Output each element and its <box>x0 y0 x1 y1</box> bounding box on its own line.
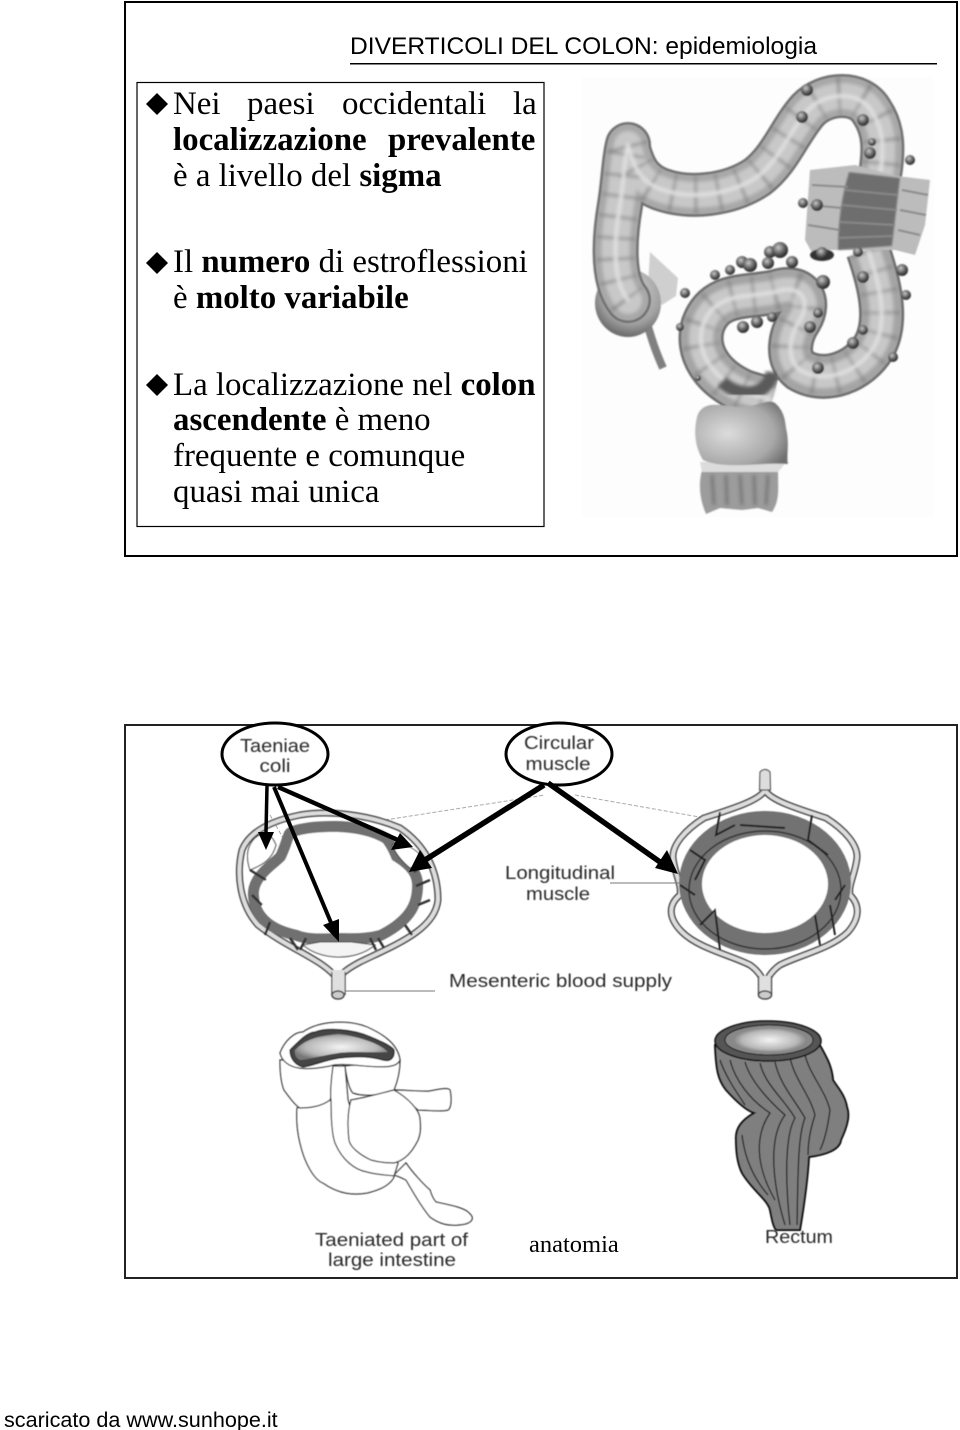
stalk: mesenteric vessel <box>332 970 345 999</box>
bullet text: colon ascendente <box>146 367 536 510</box>
illustration: taeniated part of large intestine <box>280 1022 472 1225</box>
bullet text: numero di estroflessioni: è molto variabile <box>173 280 409 316</box>
bullet text: localizzazione prevalente <box>146 86 537 194</box>
bullet text: colon ascendente: La localizzazione nel colon <box>173 367 536 403</box>
colon: caecum and appendix <box>595 252 678 368</box>
heading: slide title: DIVERTICOLI DEL COLON: epidemiologia <box>350 33 817 60</box>
caption: anatomia: anatomia <box>529 1231 619 1258</box>
bullet text: localizzazione prevalente: localizzazione <box>173 122 367 158</box>
label: Longitudinal muscle: muscle <box>526 884 590 904</box>
arrow: circular muscle to left ring <box>409 785 544 872</box>
illustration: colon with diverticula <box>582 77 934 517</box>
bullet text: localizzazione prevalente: è a livello del sigma <box>173 158 442 194</box>
callout: Taeniae coli: coli <box>260 756 290 776</box>
arrow: taeniae to bottom band <box>274 787 339 942</box>
bullet text: colon ascendente: quasi mai unica <box>173 474 380 510</box>
colon: twist shadow <box>722 372 772 393</box>
bullet text: numero di estroflessioni: Il numero di estroflessioni <box>173 244 528 280</box>
guide lines <box>270 795 705 930</box>
label: Longitudinal muscle: Longitudinal <box>505 863 615 883</box>
arrow: taeniae to right band <box>278 787 413 850</box>
diagram: left ring with taeniae <box>239 813 438 999</box>
bullet text: localizzazione prevalente: Nei <box>173 86 220 122</box>
label: Longitudinal muscle <box>505 863 680 904</box>
colon: descending and sigmoid <box>701 250 882 400</box>
panel: text box <box>137 82 544 526</box>
diagram: right ring <box>671 770 857 999</box>
bullet text: colon ascendente: ascendente è meno <box>173 402 431 438</box>
arrow: taeniae to left band <box>258 786 274 850</box>
colon: ascending and transverse <box>616 96 882 300</box>
illustration: rectum <box>715 1021 848 1230</box>
bullet text: localizzazione prevalente: la <box>513 86 537 122</box>
bullet text: localizzazione prevalente: occidentali <box>342 86 486 122</box>
callout: Circular muscle <box>506 723 612 785</box>
colon: opened mesentery section <box>805 165 930 261</box>
callout: Circular muscle: muscle <box>526 754 590 774</box>
callout: Circular muscle: Circular <box>524 733 594 753</box>
label: Taeniated part of large intestine: large intestine <box>328 1250 456 1270</box>
panel: anatomy slide <box>125 723 957 1278</box>
bullet text: localizzazione prevalente: paesi <box>247 86 315 122</box>
bullet text: localizzazione prevalente: prevalente <box>388 122 535 158</box>
title rule <box>350 63 937 64</box>
colon: diverticula <box>676 84 915 381</box>
stalks: vessel ends <box>758 770 772 999</box>
label: Rectum: Rectum <box>765 1227 833 1247</box>
callout: Taeniae coli: Taeniae <box>240 736 310 756</box>
bullet text: colon ascendente: frequente e comunque <box>173 438 465 474</box>
panel: epidemiology slide <box>125 2 957 556</box>
label: Taeniated part of large intestine <box>315 1230 469 1270</box>
callout: Taeniae coli <box>222 723 328 785</box>
bullet text: numero di estroflessioni <box>146 244 528 316</box>
colon: rectum bulge and cut stump <box>695 402 788 514</box>
arrow: circular muscle to right ring <box>548 783 678 874</box>
label: Taeniated part of large intestine: Taeniated part of <box>315 1230 469 1250</box>
label: Mesenteric blood supply: Mesenteric blood supply <box>449 971 672 991</box>
